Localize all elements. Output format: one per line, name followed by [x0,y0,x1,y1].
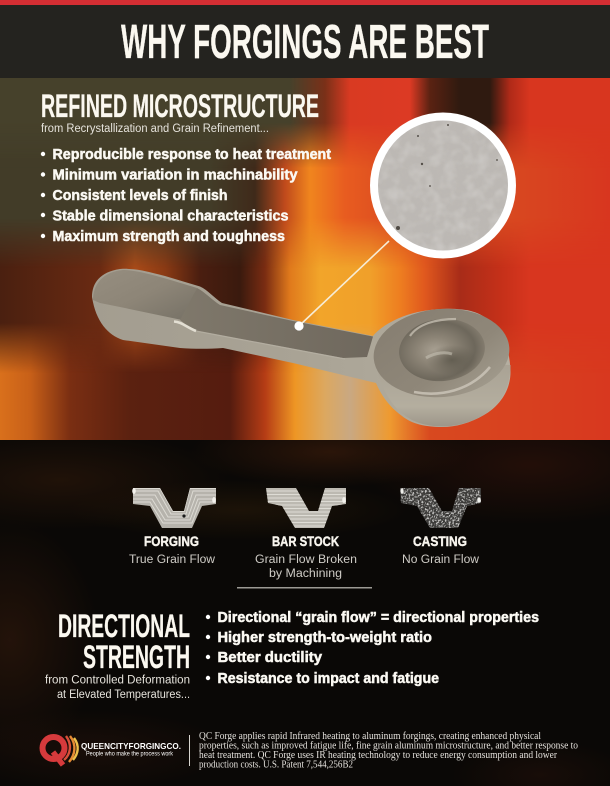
divider under comparison [237,587,372,588]
top red bar [0,0,610,5]
bullet list: microstructure benefits: Minimum variation in machinability [52,168,298,184]
heading: directional strength: STRENGTH [83,639,190,675]
heading: directional strength [58,608,190,675]
forging diagram [132,488,216,528]
bullet list: microstructure benefits: Reproducible response to heat treatment [52,147,331,163]
bowl cavity [396,315,488,385]
shaft top face [180,288,373,358]
callout: microstructure magnifier circle [370,112,516,258]
footer text block: QC Forge applies rapid Infrared heating to aluminum forgings, creating enhanced physical [199,731,541,742]
bar stock caption: by Machining [269,568,342,580]
forged spoon part photo [92,269,513,427]
bar stock label: BAR STOCK [272,533,339,549]
bullet list: microstructure benefits: Consistent levels of finish [52,188,228,204]
bullet list: microstructure benefits: Stable dimensional characteristics [52,208,288,224]
forging label: FORGING [144,533,199,549]
dark lower background [0,440,610,786]
bullet list: directional benefits: Directional “grain flow” = directional properties [218,610,539,626]
bullet list: directional benefits [206,610,539,687]
bar stock caption [255,554,357,580]
heading: refined microstructure: REFINED MICROSTRUCTURE [41,88,319,124]
forging caption: True Grain Flow [129,554,216,566]
bar stock diagram [266,488,346,528]
casting label: CASTING [413,533,467,549]
section: directional strength [45,608,539,701]
bar stock caption: Grain Flow Broken [255,554,357,566]
grain flow comparison [129,485,485,580]
bullet list: microstructure benefits: Maximum strength and toughness [52,229,285,245]
casting diagram [400,488,481,528]
footer text block: properties, such as improved fatigue life, fine grain aluminum microstructure, and better response to [199,740,578,752]
icon: Q mark [42,736,78,765]
subheading: from Controlled Deformation [45,674,190,686]
bullet list: directional benefits: Higher strength-to-weight ratio [218,630,432,646]
shaft edge highlight [174,322,196,331]
subheading [45,674,190,701]
logo tagline: People who make the process work [86,752,174,758]
fire background photo [0,78,610,440]
footer text block: heat treatment. QC Forge uses IR heating technology to reduce energy consumption and lower [199,750,558,761]
heading: directional strength: DIRECTIONAL [58,608,190,644]
spoon silhouette [92,269,510,427]
header band [0,5,610,78]
section: refined microstructure [41,88,331,245]
subheading: at Elevated Temperatures... [57,689,190,701]
footer text block [199,731,578,770]
subheading: from Recrystallization and Grain Refinement... [41,123,269,135]
casting caption: No Grain Flow [402,554,480,566]
handle end top face [93,270,197,320]
bullet list: directional benefits: Resistance to impact and fatigue [218,671,439,687]
footer vertical divider [189,735,190,766]
bowl side wall [376,360,510,426]
bullet list: microstructure benefits [41,147,331,245]
bowl rim [370,303,513,403]
bullet list: directional benefits: Better ductility [218,650,322,666]
callout: leader line and dot [294,241,389,331]
logo: Queen City Forging Co. [42,736,181,765]
footer text block: production costs. U.S. Patent 7,544,256B2 [199,760,353,770]
logo wordmark: QUEENCITYFORGINGCO. [81,741,181,751]
